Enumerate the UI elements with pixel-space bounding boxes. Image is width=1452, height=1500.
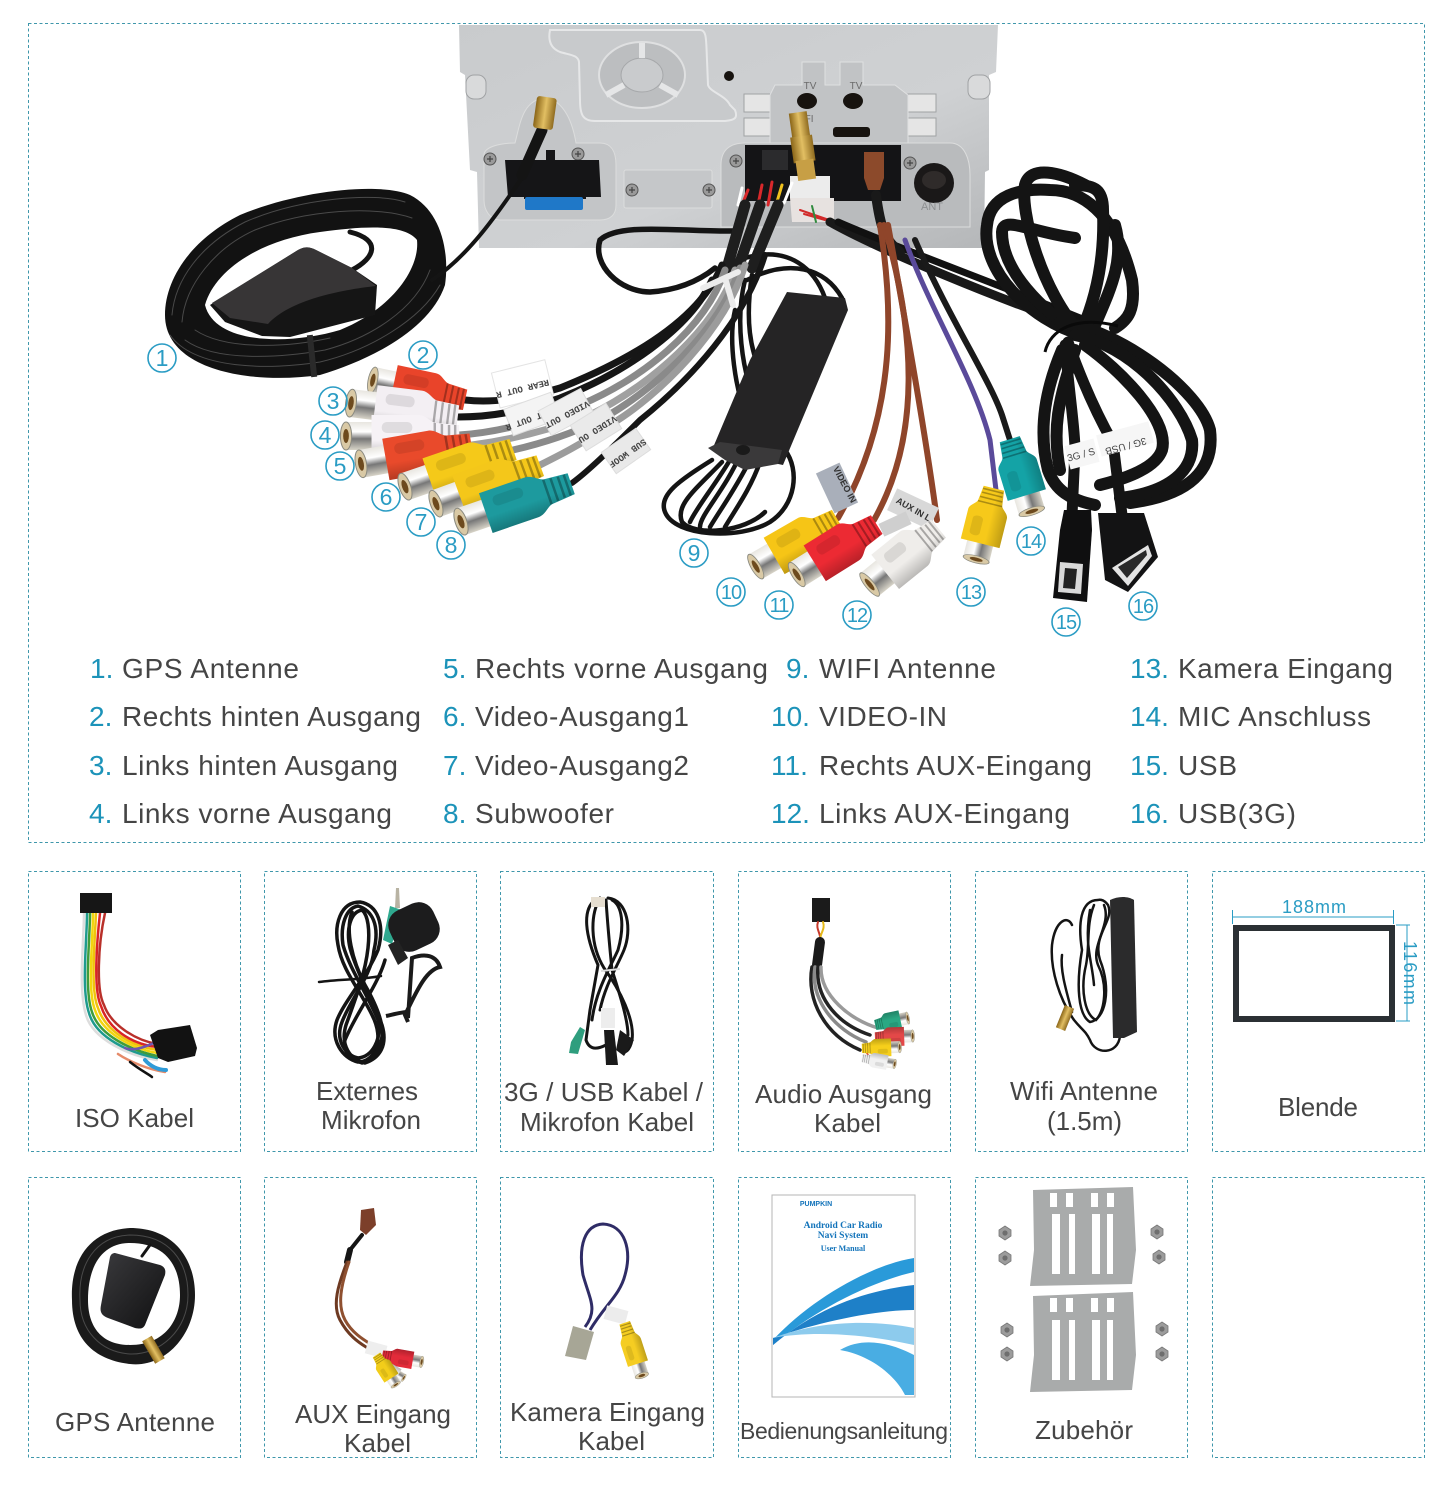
mic neck: [388, 940, 408, 965]
ISO connector: [80, 893, 112, 913]
RCA connector 2: red rear right: [364, 360, 469, 419]
lower bracket: [1030, 1292, 1136, 1392]
caption: Zubehör: [1035, 1415, 1133, 1445]
panel: empty: [1212, 1178, 1424, 1458]
legend column 4: 14.: [1130, 701, 1169, 732]
manual cover: Navi System: [818, 1231, 868, 1241]
manual cover: PUMPKIN: [800, 1201, 832, 1208]
callout 6: [372, 483, 400, 511]
legend column 2: 8.: [443, 798, 466, 829]
manual cover: User Manual: [821, 1244, 866, 1253]
label: FRONT OUT R: [504, 392, 563, 436]
caption: Externes: [316, 1076, 418, 1106]
panel: Wifi Antenne: [976, 872, 1188, 1152]
legend column 3: 12.: [771, 798, 810, 829]
legend column 3: 10.: [771, 701, 810, 732]
blue swoosh: [773, 1258, 914, 1345]
callout 8: 8: [445, 532, 457, 558]
cable tie: [1045, 322, 1118, 352]
callout 9: 9: [688, 540, 700, 566]
white clip: [601, 1008, 615, 1028]
label: AUX IN: AUX IN L: [894, 495, 933, 524]
antenna cable: [1052, 900, 1120, 1051]
caption: Kamera Eingang: [510, 1397, 705, 1427]
panel: Bedienungsanleitung: [738, 1178, 950, 1458]
manual cover: [772, 1195, 915, 1397]
RCA connector 11: red aux right: [782, 507, 888, 595]
embossed top plate outline: [549, 30, 736, 121]
cable: [336, 1235, 372, 1347]
white tag: [365, 1341, 387, 1358]
panel: AUX Eingang Kabel: [264, 1178, 476, 1458]
raised port plate: [770, 62, 908, 145]
legend column 1: GPS Antenne: [122, 653, 299, 684]
panel: AUX Eingang Kabel: Kabel: [344, 1428, 411, 1458]
small RCA plugs: [861, 1008, 915, 1071]
ISO wire bundle: [82, 913, 166, 1077]
legend column 3: 9.: [786, 653, 809, 684]
callout 16: [1129, 592, 1157, 620]
callout 2: [409, 341, 437, 369]
coil highlights: [170, 197, 440, 366]
callout 14: [1017, 527, 1045, 555]
callout 15: 15: [1056, 612, 1077, 634]
legend column 4: Kamera Eingang: [1178, 653, 1393, 684]
callout 5: 5: [334, 453, 346, 479]
legend column 4: 15.: [1130, 750, 1169, 781]
callout 2: 2: [417, 342, 429, 368]
width dimension: 188mm: [1282, 897, 1346, 917]
caption: Audio Ausgang: [755, 1079, 932, 1109]
label: SUB WOOFER: [601, 428, 651, 474]
RCA connector 4: white front left: [340, 415, 459, 457]
legend column 3: 11.: [771, 750, 808, 781]
head unit rear metal plate: [459, 25, 998, 248]
legend column 4: [1130, 653, 1393, 829]
legend column 2: [443, 653, 768, 829]
USB tags: 3G / S: [1066, 447, 1097, 465]
mic cable coil: [335, 902, 385, 1063]
puck lead: [142, 1245, 150, 1256]
label: AUX IN R: [878, 511, 912, 537]
plate TV and WIFI stamps: WIFI: [792, 114, 814, 125]
label: SUB WOOFER: SUB WOOF: [607, 436, 648, 469]
yellow plug: [615, 1319, 653, 1381]
panel: 3G / USB / Mikrofon Kabel: Mikrofon Kabel: [520, 1107, 694, 1137]
callout 12: [843, 601, 871, 629]
legend column 2: Video-Ausgang2: [475, 750, 689, 781]
caption: Wifi Antenne: [1010, 1076, 1158, 1106]
legend column 2: Video-Ausgang1: [475, 701, 689, 732]
antenna socket: [914, 163, 954, 213]
frame: [1236, 928, 1392, 1019]
panel: Audio Ausgang Kabel: Kabel: [814, 1108, 881, 1138]
legend column 4: 13.: [1130, 653, 1169, 684]
GPS puck: [101, 1253, 165, 1329]
manual cover: Android Car Radio: [804, 1221, 883, 1231]
GPS puck: [210, 247, 377, 337]
label: VIDEO OUT 1: VIDEO OUT: [543, 398, 591, 430]
caption: AUX Eingang: [295, 1399, 451, 1429]
height dimension: 116mm: [1400, 941, 1420, 1005]
legend column 3: WIFI Antenne: [819, 653, 996, 684]
puck top face: [212, 247, 376, 324]
plate screws: [484, 148, 916, 196]
callout 11: [765, 591, 793, 619]
legend column 3: VIDEO-IN: [819, 701, 947, 732]
purple loop cable: [581, 1224, 628, 1330]
plate TV and WIFI stamps: TV: [850, 81, 863, 92]
legend column 1: 2.: [89, 701, 112, 732]
GPS cable: [432, 172, 526, 280]
legend column 1: Links hinten Ausgang: [122, 750, 398, 781]
TV holes and slot: [724, 71, 870, 137]
ISO end connectors: [150, 1025, 197, 1062]
mic clip: [405, 956, 440, 1022]
left black connector: [505, 150, 601, 199]
round knock-out: [599, 42, 685, 108]
legend column 1: 4.: [89, 798, 112, 829]
legend column 3: Rechts AUX-Eingang: [819, 750, 1092, 781]
legend column 2: 5.: [443, 653, 466, 684]
label: VIDEO OUT 2: [570, 403, 622, 451]
USB tags: 3G / USB: [1104, 435, 1147, 456]
wifi cable loops: [599, 229, 842, 533]
grey plug: [565, 1326, 594, 1360]
teal plug: [569, 1027, 585, 1054]
plate TV and WIFI stamps: TV: [804, 81, 817, 92]
legend column 2: 6.: [443, 701, 466, 732]
coil highlights: [80, 1235, 188, 1354]
RCA connector 10: yellow video in: [741, 501, 848, 587]
SMA connector: [1056, 1005, 1074, 1031]
upper bracket: [1030, 1187, 1136, 1286]
black plugs: [604, 1030, 618, 1065]
callout 1: [148, 344, 176, 372]
cable coil: [72, 1228, 195, 1364]
callout 4: 4: [319, 422, 332, 448]
wifi SMA connector: [787, 111, 818, 181]
RCA connector 8: teal subwoofer: [449, 464, 578, 543]
callout 5: [326, 452, 354, 480]
caption: 3G / USB Kabel /: [504, 1077, 704, 1107]
screws: [999, 1225, 1168, 1361]
right connector block: [745, 145, 901, 201]
panel: main wiring overview: [28, 24, 1424, 842]
RCA connector 6: yellow video out 1: [393, 430, 520, 508]
panel: Blende: [1212, 872, 1424, 1152]
panel: ISO Kabel: [28, 872, 240, 1152]
legend column 3: Links AUX-Eingang: [819, 798, 1070, 829]
item 1: GPS antenna coil and puck: [165, 96, 557, 378]
USB plug 15: [1053, 510, 1092, 602]
height dimension: [1396, 925, 1420, 1021]
items 15 and 16: USB cable coil: [986, 172, 1211, 602]
RCA plugs: [369, 1346, 425, 1391]
RCA connector 12: white aux left: [852, 511, 953, 604]
puck lead: [350, 232, 372, 270]
legend column 4: MIC Anschluss: [1178, 701, 1371, 732]
callout 8: [437, 531, 465, 559]
RCA connector 5: red front right: [352, 424, 475, 485]
label: FRONT OUT R: FRONT OUT R: [504, 402, 563, 432]
callout 6: 6: [380, 484, 392, 510]
blue fuse: [525, 197, 583, 210]
legend column 1: [89, 653, 421, 829]
panel: 3G / USB / Mikrofon Kabel: [500, 872, 714, 1152]
white socket and brown cable bundle: [790, 195, 1085, 520]
SMA connector: [142, 1336, 165, 1364]
RCA connector 7: yellow video out 2: [424, 446, 547, 525]
caption: Bedienungsanleitung: [740, 1418, 948, 1444]
panel: Audio Ausgang Kabel: [738, 872, 950, 1152]
callout 14: 14: [1021, 531, 1042, 553]
panel: Externes Mikrofon: Mikrofon: [321, 1105, 421, 1135]
cable tie: [601, 969, 620, 971]
antenna body: [1110, 897, 1137, 1038]
SMA connector: [533, 96, 557, 130]
callout 3: [319, 387, 347, 415]
callout 11: 11: [770, 595, 789, 617]
RCA connector 13: yellow camera: [956, 483, 1013, 568]
cable tie: [307, 335, 317, 377]
mounting tabs: [466, 75, 990, 136]
caption: GPS Antenne: [55, 1407, 215, 1437]
callout 15: [1052, 608, 1080, 636]
wires: [811, 922, 885, 1068]
item 9: wifi antenna body: [708, 292, 848, 470]
label: REAR OUT R: [491, 360, 554, 408]
legend column 4: 16.: [1130, 798, 1169, 829]
legend column 3: [771, 653, 1092, 829]
label: VIDEO OUT 2: VIDEO OU: [576, 413, 618, 444]
legend column 4: USB(3G): [1178, 798, 1296, 829]
panel: Zubehör: [976, 1178, 1188, 1458]
panel: Kamera Eingang Kabel: Kabel: [578, 1426, 645, 1456]
green plug and pin: [395, 888, 400, 908]
USB plug 16: [1098, 513, 1158, 592]
RCA connector 14: teal microphone: [991, 433, 1052, 521]
legend column 1: 3.: [89, 750, 112, 781]
RCA connector 3: white rear left: [343, 382, 460, 437]
antenna socket: ANT: [921, 201, 943, 213]
width dimension: [1232, 897, 1394, 924]
callout 10: 10: [721, 582, 742, 604]
mic foam head: [383, 897, 445, 957]
connector labels on AUX cables: [816, 463, 939, 537]
brown socket: [864, 152, 884, 190]
legend column 1: 1.: [90, 653, 113, 684]
legend column 2: Rechts vorne Ausgang: [475, 653, 768, 684]
legend column 4: USB: [1178, 750, 1237, 781]
zip tie: [703, 272, 738, 305]
label: REAR OUT R: REAR OUT R: [494, 377, 550, 399]
circled number callouts: [148, 341, 1157, 636]
plate TV and WIFI stamps: [792, 81, 863, 125]
callout 7: 7: [415, 509, 427, 535]
USB tags: [1064, 421, 1154, 469]
callout 10: [717, 578, 745, 606]
tag: [604, 1305, 628, 1325]
callout 13: 13: [961, 582, 982, 604]
callout 12: 12: [847, 605, 868, 627]
callout 16: 16: [1133, 596, 1154, 618]
legend column 2: 7.: [443, 750, 466, 781]
cable loop: [586, 898, 632, 1052]
panel: Kamera Eingang Kabel: [500, 1178, 714, 1458]
caption: ISO Kabel: [75, 1103, 194, 1133]
panel: Wifi Antenne: (1.5m): [1047, 1106, 1122, 1136]
output cable harness: [458, 182, 792, 483]
numbered legend: [89, 653, 1393, 829]
label: VIDEO OUT 1: [538, 388, 594, 436]
callout 1: 1: [156, 345, 168, 371]
brown connector: [360, 1208, 376, 1235]
callout 9: [680, 539, 708, 567]
panel: GPS Antenne: [28, 1178, 240, 1458]
callout 13: [957, 578, 985, 606]
panel: Externes Mikrofon: [264, 872, 476, 1152]
legend column 2: Subwoofer: [475, 798, 614, 829]
callout 4: [311, 421, 339, 449]
caption: Blende: [1278, 1092, 1358, 1122]
cable tie: [319, 976, 381, 982]
connector: [812, 898, 830, 922]
plate stamped recesses: [484, 98, 616, 220]
callout 3: 3: [327, 388, 339, 414]
legend column 1: Rechts hinten Ausgang: [122, 701, 421, 732]
callout 7: [407, 508, 435, 536]
legend column 1: Links vorne Ausgang: [122, 798, 392, 829]
small labels: [591, 897, 605, 907]
label: VIDEO IN: VIDEO IN: [831, 465, 858, 504]
harness cable labels: [491, 360, 651, 474]
